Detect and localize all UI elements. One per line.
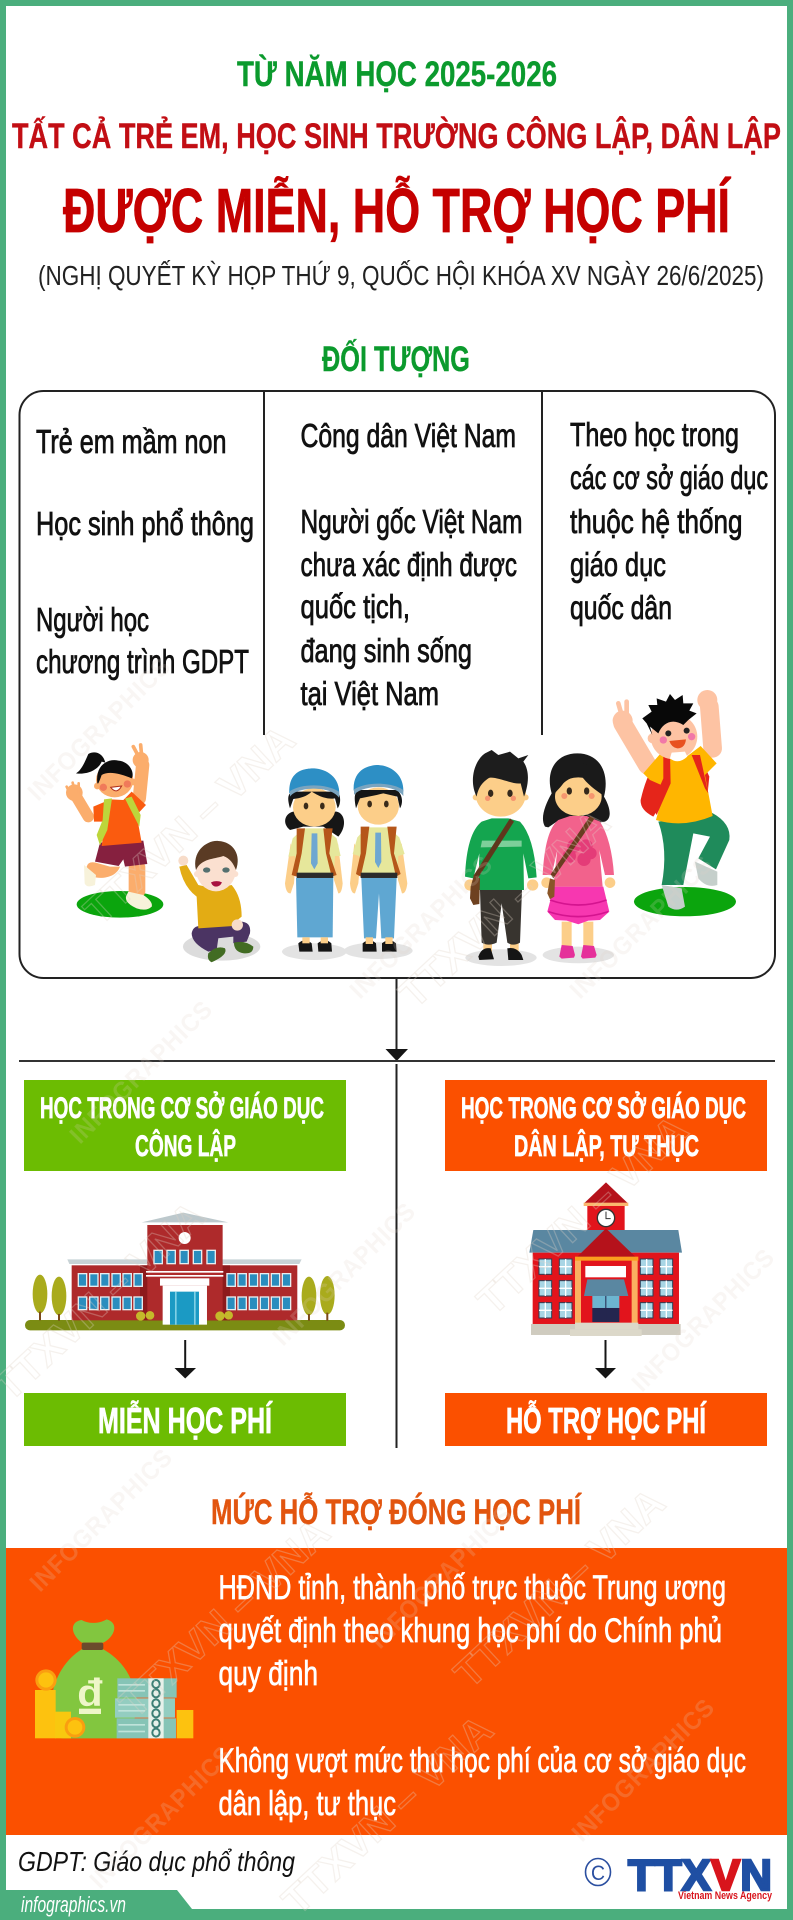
arrow: private school to support bbox=[595, 1340, 616, 1378]
panel: support level band bbox=[6, 1548, 787, 1835]
text: column 2: quốc tịch, bbox=[300, 588, 410, 625]
icon: student boy bbox=[344, 765, 413, 959]
watermarks: INFOGRAPHICS bbox=[564, 850, 719, 1004]
footer tab bbox=[0, 1890, 192, 1920]
icon: girl in pink sweater bbox=[541, 753, 615, 963]
watermarks: TTXVN – VNA bbox=[111, 1510, 339, 1727]
watermarks bbox=[0, 652, 781, 1920]
title: school year line: TỪ NĂM HỌC 2025-2026 bbox=[237, 54, 557, 94]
text: column 1: Học sinh phổ thông bbox=[36, 505, 254, 542]
divider lines bbox=[19, 1060, 775, 1448]
watermarks: INFOGRAPHICS bbox=[626, 1243, 781, 1397]
text: column 2: Công dân Việt Nam bbox=[300, 417, 516, 454]
watermarks: INFOGRAPHICS bbox=[267, 1197, 422, 1351]
text: column 3 bbox=[570, 416, 768, 626]
text: column 3: Theo học trong bbox=[570, 416, 739, 453]
watermarks: INFOGRAPHICS bbox=[64, 995, 219, 1149]
icon: public school building bbox=[25, 1213, 345, 1330]
icon: student girl bbox=[282, 768, 347, 960]
text: column 1 bbox=[36, 423, 254, 680]
icon: private school building bbox=[529, 1182, 682, 1336]
text: column 2 bbox=[300, 417, 522, 712]
logo: TTXVN: Vietnam News Agency bbox=[678, 1890, 773, 1902]
panel: private school header bbox=[445, 1080, 767, 1171]
watermarks: INFOGRAPHICS bbox=[344, 850, 499, 1004]
watermarks: TTXVN – VNA bbox=[274, 1707, 502, 1920]
watermarks: TTXVN – VNA bbox=[391, 800, 619, 1017]
watermarks: TTXVN – VNA bbox=[76, 717, 304, 934]
icon: jumping girl bbox=[66, 745, 163, 918]
watermarks: INFOGRAPHICS bbox=[22, 652, 177, 806]
panel: tuition support bbox=[445, 1393, 767, 1446]
panel: public school header: HỌC TRONG CƠ SỞ GIÁO DỤC bbox=[40, 1091, 324, 1125]
watermarks: INFOGRAPHICS bbox=[364, 1500, 519, 1654]
heading: support level: MỨC HỖ TRỢ ĐÓNG HỌC PHÍ bbox=[211, 1492, 582, 1532]
text: column 2: Người gốc Việt Nam bbox=[300, 503, 522, 540]
panel: public school header: CÔNG LẬP bbox=[135, 1129, 236, 1163]
icon: money bag, coins and banknotes bbox=[35, 1619, 193, 1738]
text: column 1: chương trình GDPT bbox=[36, 643, 249, 680]
icon: boy in green sweater bbox=[464, 750, 538, 966]
icon: copyright bbox=[586, 1858, 610, 1886]
icon: money bag, coins and banknotes: đ bbox=[77, 1671, 103, 1715]
icon: jumping boy bbox=[613, 690, 736, 916]
connector with arrow bbox=[386, 978, 408, 1061]
text: column 1: Trẻ em mầm non bbox=[36, 423, 226, 460]
text: column 1: Người học bbox=[36, 601, 149, 638]
footnote: GDPT: Giáo dục phổ thông bbox=[18, 1846, 295, 1877]
panel: public school header bbox=[24, 1080, 346, 1171]
watermarks: INFOGRAPHICS bbox=[566, 1693, 721, 1847]
text: support details: quy định bbox=[218, 1655, 318, 1693]
text: column 2: chưa xác định được bbox=[300, 546, 517, 583]
text: column 2: đang sinh sống bbox=[300, 632, 472, 669]
panel: subjects box bbox=[20, 391, 775, 978]
text: support details: dân lập, tư thục bbox=[218, 1785, 396, 1823]
panel: private school header: DÂN LẬP, TƯ THỤC bbox=[514, 1129, 699, 1163]
watermarks: TTXVN – VNA bbox=[469, 1107, 697, 1324]
text: support details bbox=[218, 1569, 746, 1823]
text: column 3: quốc dân bbox=[570, 589, 672, 626]
watermarks: TTXVN – VNA bbox=[446, 1480, 674, 1697]
text: column 3: giáo dục bbox=[570, 546, 666, 583]
text: column 3: thuộc hệ thống bbox=[570, 503, 742, 540]
footer tab: infographics.vn bbox=[21, 1892, 126, 1917]
icon: copyright: C bbox=[591, 1862, 605, 1885]
heading: subjects: ĐỐI TƯỢNG bbox=[322, 339, 470, 379]
watermarks: INFOGRAPHICS bbox=[24, 1443, 179, 1597]
icon: sitting baby bbox=[178, 841, 260, 962]
panel: tuition exemption bbox=[24, 1393, 346, 1446]
logo: TTXVN: TTXVN bbox=[628, 1851, 772, 1900]
panel: tuition exemption: MIỄN HỌC PHÍ bbox=[98, 1399, 273, 1441]
arrow: public school to exemption bbox=[174, 1340, 196, 1378]
watermarks: INFOGRAPHICS bbox=[84, 1740, 239, 1894]
text: column 2: tại Việt Nam bbox=[300, 675, 439, 712]
